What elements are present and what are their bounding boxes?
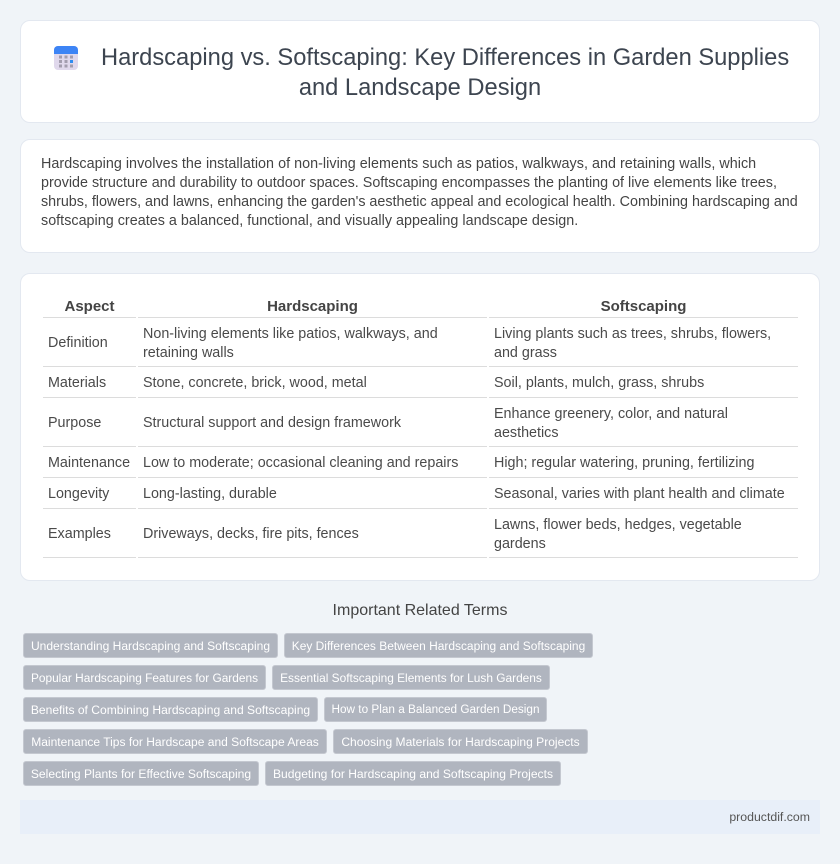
comparison table: Enhance greenery, color, and natural <box>494 406 728 422</box>
comparison table: Examples <box>48 526 111 542</box>
related terms tags: Key Differences Between Hardscaping and Softscaping <box>292 639 585 653</box>
header card <box>20 20 820 123</box>
comparison table: Hardscaping <box>267 298 358 315</box>
comparison table: Aspect <box>64 298 115 315</box>
comparison table: Long-lasting, durable <box>143 486 277 502</box>
icon: calendar <box>54 46 78 70</box>
title: and Landscape Design <box>299 75 541 101</box>
intro text <box>41 156 798 229</box>
comparison table: Non-living elements like patios, walkways, and <box>143 326 438 342</box>
comparison table: Definition <box>48 335 108 351</box>
comparison table: Low to moderate; occasional cleaning and repairs <box>143 455 458 471</box>
intro text: softscaping creates a balanced, functional, and visually appealing landscape design. <box>41 213 578 229</box>
comparison table: Stone, concrete, brick, wood, metal <box>143 375 367 391</box>
comparison table: Living plants such as trees, shrubs, flowers, <box>494 326 771 342</box>
title <box>101 45 789 101</box>
related terms tags: Budgeting for Hardscaping and Softscaping Projects <box>273 767 553 781</box>
related terms tags: Understanding Hardscaping and Softscaping <box>31 639 270 653</box>
comparison table: aesthetics <box>494 425 559 441</box>
comparison table: Structural support and design framework <box>143 415 401 431</box>
comparison table: Materials <box>48 375 106 391</box>
footer text: productdif.com <box>729 810 810 824</box>
comparison table: Lawns, flower beds, hedges, vegetable <box>494 517 742 533</box>
related terms tags: Maintenance Tips for Hardscape and Softscape Areas <box>31 735 319 749</box>
comparison table: retaining walls <box>143 345 234 361</box>
related terms tags: Essential Softscaping Elements for Lush Gardens <box>280 671 542 685</box>
comparison table: Softscaping <box>601 298 686 315</box>
comparison table: and grass <box>494 345 557 361</box>
related terms tags: How to Plan a Balanced Garden Design <box>332 703 539 716</box>
related terms tags: Popular Hardscaping Features for Gardens <box>31 671 258 685</box>
footer bar <box>20 800 820 834</box>
intro text: Hardscaping involves the installation of non-living elements such as patios, walkways, and retaining walls, which <box>41 156 756 172</box>
comparison table: High; regular watering, pruning, fertilizing <box>494 455 754 471</box>
related terms tags: Selecting Plants for Effective Softscaping <box>31 767 251 781</box>
comparison table: Soil, plants, mulch, grass, shrubs <box>494 375 704 391</box>
intro text: shrubs, flowers, and lawns, enhancing the garden's aesthetic appeal and ecological health. Combining hardscaping and <box>41 194 798 210</box>
related terms heading: Important Related Terms <box>333 602 507 619</box>
comparison table <box>43 298 798 558</box>
related terms tags: Benefits of Combining Hardscaping and Softscaping <box>31 703 310 717</box>
title: Hardscaping vs. Softscaping: Key Differences in Garden Supplies <box>101 45 789 71</box>
table panel <box>20 273 820 581</box>
comparison table: gardens <box>494 536 546 552</box>
intro text: provide structure and durability to outdoor spaces. Softscaping encompasses the planting of live elements like trees, <box>41 175 777 191</box>
related terms tags <box>23 633 593 786</box>
comparison table: Maintenance <box>48 455 130 471</box>
comparison table: Seasonal, varies with plant health and climate <box>494 486 785 502</box>
comparison table: Driveways, decks, fire pits, fences <box>143 526 359 542</box>
comparison table: Purpose <box>48 415 101 431</box>
comparison table: Longevity <box>48 486 109 502</box>
intro panel <box>20 139 820 253</box>
related terms tags: Choosing Materials for Hardscaping Projects <box>341 735 580 749</box>
